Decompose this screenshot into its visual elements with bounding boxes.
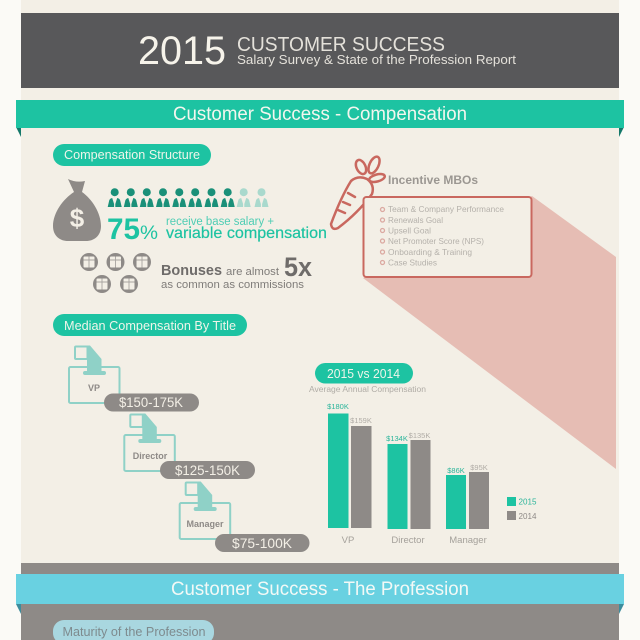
panel: MBO list: Upsell Goal <box>388 226 431 236</box>
bar chart: $159K <box>350 416 372 425</box>
panel: MBO list: Team & Company Performance <box>388 204 504 214</box>
ballot: Manager <box>180 482 310 552</box>
pill heading: compensation structure: Compensation Structure <box>64 147 200 162</box>
panel: MBO list: Case Studies <box>388 258 437 268</box>
pill heading: median compensation: Median Compensation By Title <box>64 318 236 333</box>
people pictogram: 75 percent <box>108 188 268 207</box>
panel: MBO list: Renewals Goal <box>388 215 443 225</box>
stat: 75 percent: receive base salary + <box>166 216 274 228</box>
ballot: Director: $125-150K <box>175 462 241 478</box>
stat: bonuses 5x <box>161 252 312 291</box>
stat: bonuses 5x: as common as commissions <box>161 279 305 291</box>
bar chart: VP <box>342 535 354 546</box>
stat: 75 percent: % <box>140 223 158 244</box>
header banner: CUSTOMER SUCCESS <box>237 34 445 56</box>
stat: 75 percent: 75 <box>107 213 140 246</box>
ballot: Director: Director <box>133 451 168 461</box>
icon: money bag <box>53 179 101 241</box>
stat: bonuses 5x: Bonuses <box>161 262 222 279</box>
ribbon: profession section <box>16 574 624 614</box>
stat: bonuses 5x: 5x <box>284 252 312 282</box>
icons: gifts <box>80 253 151 293</box>
heading: incentive MBOs: Incentive MBOs <box>388 173 478 187</box>
ballot: VP: $150-175K <box>119 394 184 410</box>
bar chart: $135K <box>409 431 430 440</box>
ballot: Manager: $75-100K <box>232 535 293 551</box>
pill heading: compensation structure <box>53 144 211 166</box>
pill heading: maturity of the profession: Maturity of the Profession <box>62 625 206 639</box>
pill heading: median compensation <box>53 314 247 336</box>
chart subtitle: Average Annual Compensation <box>309 385 426 394</box>
header banner <box>21 13 619 88</box>
pill heading: 2015 vs 2014 <box>315 363 413 384</box>
lower section background <box>21 563 619 640</box>
bar chart: $95K <box>470 463 488 472</box>
ballot: Manager: Manager <box>186 519 224 529</box>
ballot: VP <box>69 346 199 412</box>
bar chart: $86K <box>447 466 465 475</box>
chart legend <box>507 496 537 521</box>
ballot: VP: VP <box>88 383 100 393</box>
ribbon: profession section: Customer Success - The Profession <box>171 579 469 600</box>
ribbon: compensation section <box>16 100 624 137</box>
stat: 75 percent: variable compensation <box>166 225 327 242</box>
bar chart <box>327 402 489 546</box>
stat: bonuses 5x: are almost <box>226 266 279 278</box>
stat: 75 percent <box>107 213 327 246</box>
bar chart: $134K <box>386 434 408 443</box>
long shadow behind MBO box <box>363 196 616 469</box>
panel: MBO list <box>364 197 532 277</box>
bar chart: Director <box>391 535 425 546</box>
pill heading: 2015 vs 2014: 2015 vs 2014 <box>327 366 400 381</box>
icon: money bag: $ <box>70 203 85 233</box>
panel: MBO list: Onboarding & Training <box>388 247 472 257</box>
bar chart: $180K <box>327 402 349 411</box>
icon: carrot <box>331 155 386 229</box>
bar chart: Manager <box>449 535 487 546</box>
header banner: Salary Survey & State of the Profession Report <box>237 52 516 67</box>
panel: MBO list: Net Promoter Score (NPS) <box>388 236 484 246</box>
header banner: 2015 <box>138 29 226 73</box>
ribbon: compensation section: Customer Success - Compensation <box>173 104 467 125</box>
chart legend: 2014 <box>518 511 537 521</box>
pill heading: maturity of the profession <box>53 620 214 640</box>
chart legend: 2015 <box>518 496 537 506</box>
ballot: Director <box>124 414 255 479</box>
